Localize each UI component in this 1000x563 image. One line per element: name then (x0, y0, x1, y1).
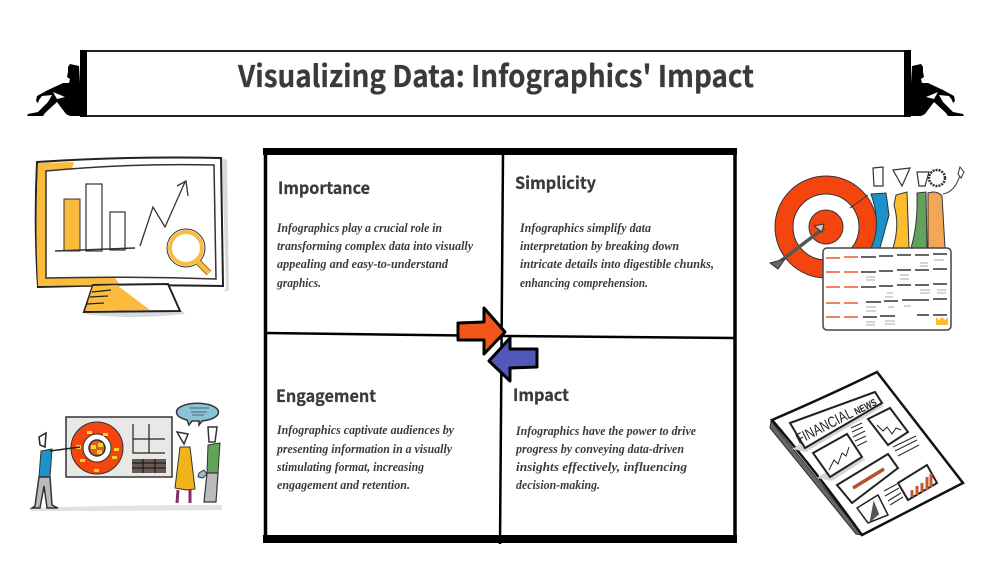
panel: simplicity: intricate details into digestible chunks, (520, 257, 714, 271)
panel: simplicity: interpretation by breaking down (520, 239, 679, 253)
icon: sitting man silhouette left (27, 64, 81, 116)
panel: importance: Infographics play a crucial role in (276, 221, 442, 235)
panel: engagement: Engagement (276, 383, 376, 407)
icon: financial newspaper (770, 372, 963, 535)
panel: importance: Importance (278, 175, 370, 199)
panel: engagement: stimulating format, increasing (276, 460, 424, 474)
panel: simplicity (515, 170, 714, 290)
panel: simplicity: enhancing comprehension. (520, 276, 648, 290)
title: Visualizing Data: Infographics' Impact (237, 52, 754, 96)
title banner (80, 50, 911, 117)
panel: impact (513, 382, 696, 492)
icon: people presenting at a board (30, 403, 222, 511)
panel: importance (276, 175, 473, 290)
panel: engagement: Infographics captivate audiences by (276, 423, 454, 437)
panel: impact: Impact (513, 382, 569, 406)
panel: importance: appealing and easy-to-understand (277, 257, 449, 271)
panel: impact: decision-making. (516, 478, 600, 492)
panel: importance: graphics. (276, 276, 321, 290)
panel: impact: insights effectively, influencing (516, 460, 687, 474)
icon: sitting man silhouette right (910, 64, 964, 116)
icon: target, arrow, people and calendar (770, 167, 964, 330)
arrow: blue pointing left (489, 338, 537, 381)
panel: engagement: presenting information in a visually (276, 442, 452, 456)
panel: impact: progress by conveying data-driven (515, 442, 684, 456)
panel: simplicity: Simplicity (515, 170, 597, 194)
panel: engagement (276, 383, 454, 492)
icon: financial newspaper: FINANCIAL NEWS (793, 393, 880, 448)
panel: impact: Infographics have the power to drive (515, 424, 696, 438)
panel: importance: transforming complex data into visually (277, 239, 473, 253)
icon: monitor with charts (36, 158, 229, 317)
panel: engagement: engagement and retention. (277, 478, 410, 492)
panel: simplicity: Infographics simplify data (519, 221, 651, 235)
arrow: orange pointing right (458, 308, 505, 354)
matrix frame (263, 148, 737, 544)
